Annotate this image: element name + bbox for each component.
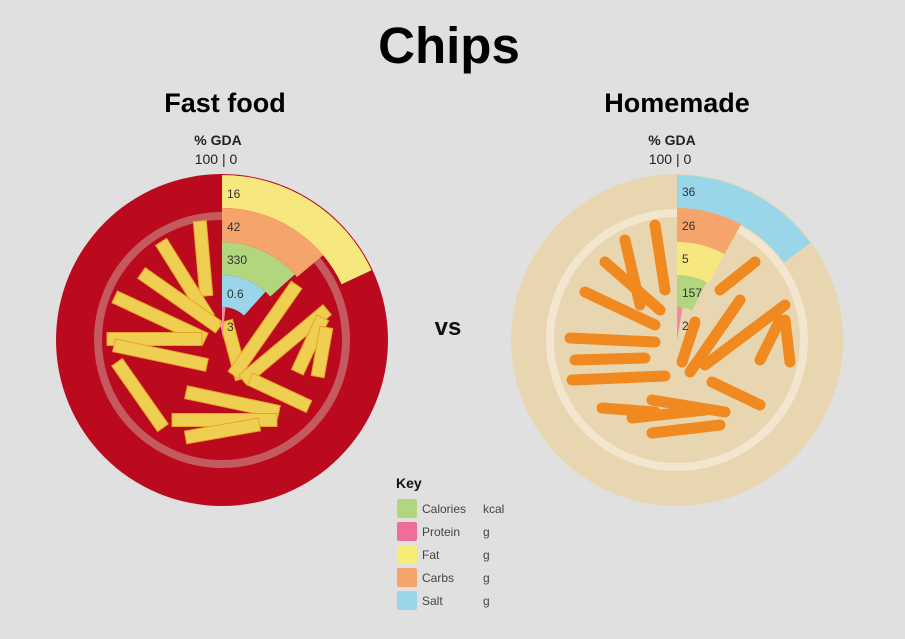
legend: key: Key	[396, 475, 422, 491]
legend: key: Calories	[422, 502, 466, 516]
legend: key: Fat	[422, 548, 440, 562]
legend: key: g	[483, 594, 490, 608]
panel: fast food plate	[56, 174, 388, 506]
legend: key: Salt	[422, 594, 443, 608]
panel: homemade plate	[511, 174, 843, 506]
values: homemade	[682, 185, 702, 333]
fries: fast food	[107, 221, 333, 444]
legend: key: Carbs	[422, 571, 454, 585]
values: fast food	[227, 187, 247, 334]
wedges: fast food	[222, 175, 372, 340]
values: homemade: 2	[682, 319, 689, 333]
values: fast food: 16	[227, 187, 241, 201]
wedges: homemade	[677, 175, 810, 340]
scale label left: 100 | 0	[195, 151, 237, 167]
values: homemade: 157	[682, 286, 702, 300]
fries: homemade	[570, 225, 790, 433]
heading: fast food: Fast food	[164, 88, 286, 118]
values: fast food: 330	[227, 253, 247, 267]
title: Chips	[378, 17, 520, 74]
legend: key: g	[483, 571, 490, 585]
scale label right	[648, 132, 696, 167]
scale label right: 100 | 0	[649, 151, 691, 167]
values: homemade: 36	[682, 185, 696, 199]
legend: key: g	[483, 525, 490, 539]
values: homemade: 5	[682, 252, 689, 266]
scale label right: % GDA	[648, 132, 696, 148]
legend: key	[396, 475, 504, 610]
heading: homemade: Homemade	[604, 88, 750, 118]
scale label left	[194, 132, 242, 167]
legend: key: Protein	[422, 525, 460, 539]
scale label left: % GDA	[194, 132, 242, 148]
values: fast food: 3	[227, 320, 234, 334]
values: fast food: 0.6	[227, 287, 244, 301]
vs label: vs	[435, 314, 461, 341]
legend: key: kcal	[483, 502, 504, 516]
values: fast food: 42	[227, 220, 241, 234]
values: homemade: 26	[682, 219, 696, 233]
legend: key: g	[483, 548, 490, 562]
